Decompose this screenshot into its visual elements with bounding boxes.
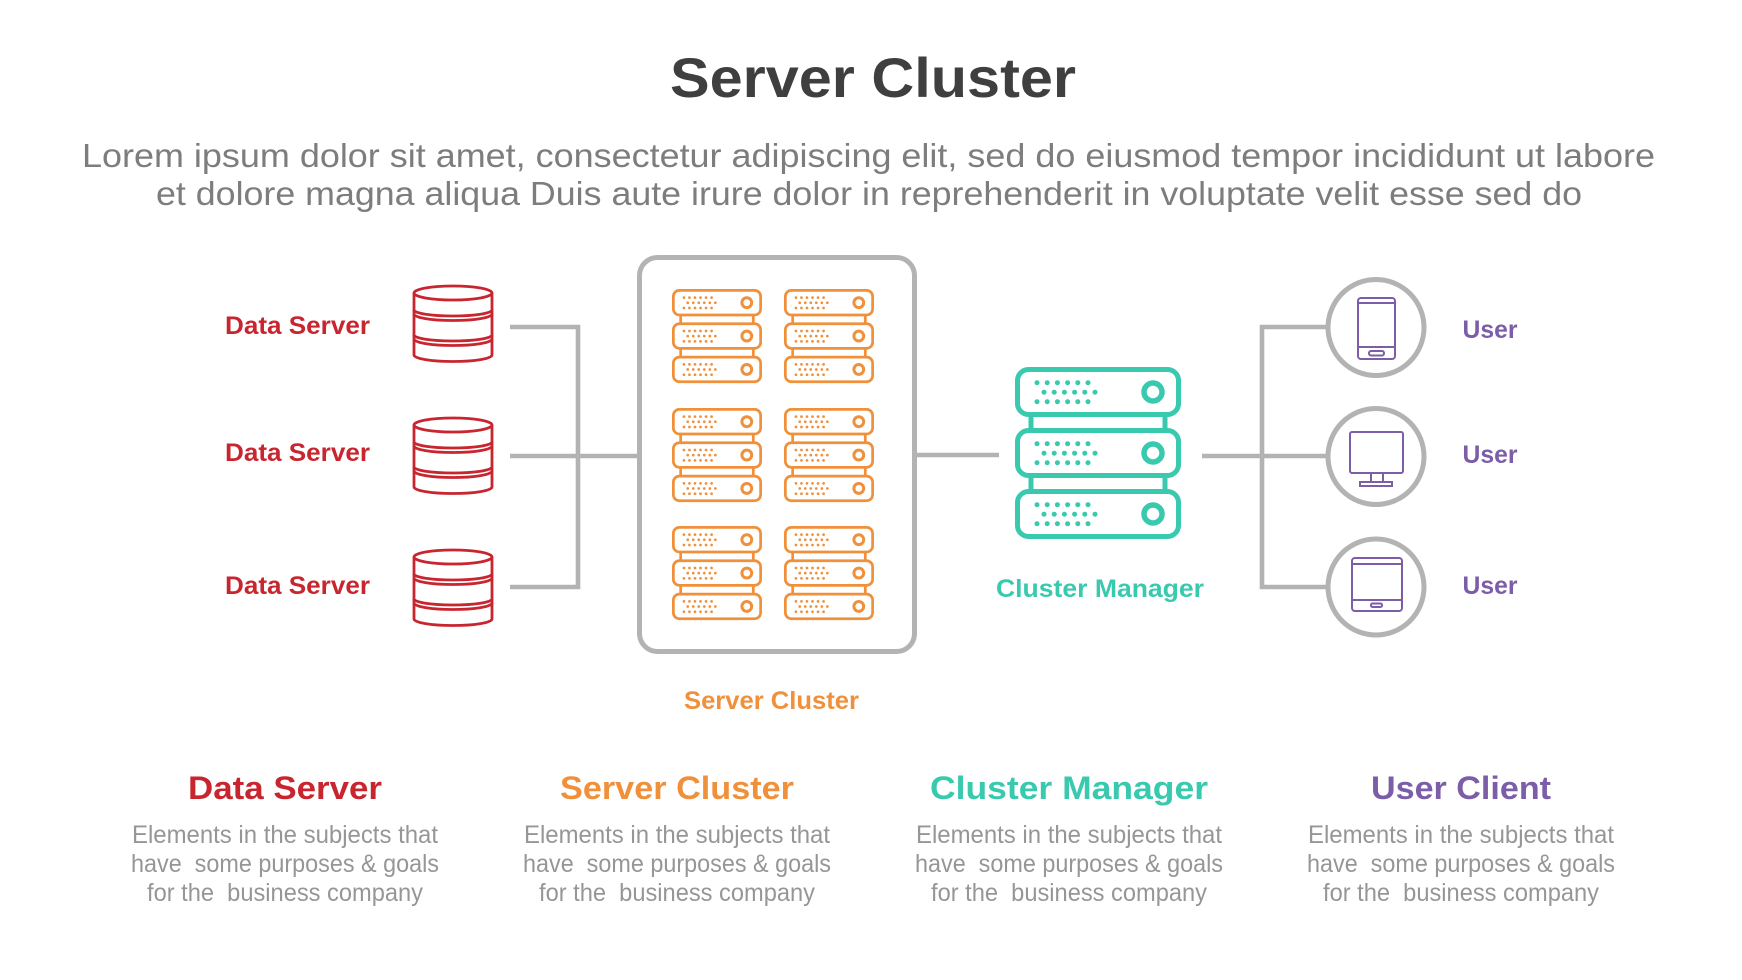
icon: database top [414,286,492,361]
column: server cluster: Elements in the subjects that [524,821,830,849]
user circle: tablet [1328,539,1424,635]
column: cluster manager [915,770,1223,907]
column: user client: for the business company [1323,879,1599,907]
data server labels: Data Server [225,439,370,467]
subtitle text: Lorem ipsum dolor sit amet, consectetur adipiscing elit, sed do eiusmod tempor incididunt ut labore [82,137,1655,174]
connector: data servers to server cluster [510,327,638,587]
column: server cluster [523,770,831,907]
column: server cluster: for the business company [539,879,815,907]
cluster manager label: Cluster Manager [996,575,1204,603]
column: data server [131,770,439,907]
column: data server: Elements in the subjects that [132,821,438,849]
server cluster label: Server Cluster [684,687,859,715]
column: cluster manager: Elements in the subjects that [916,821,1222,849]
subtitle text: et dolore magna aliqua Duis aute irure dolor in reprehenderit in voluptate velit esse sed do [156,175,1582,212]
connector: server cluster to cluster manager [917,453,999,457]
user labels: User [1462,316,1518,344]
icon: cluster manager server [1018,370,1178,536]
subtitle text [82,137,1655,212]
column: user client [1307,770,1615,907]
data server labels: Data Server [225,312,370,340]
connector: cluster manager to users [1202,327,1328,587]
user labels: User [1462,572,1518,600]
column: server cluster: Server Cluster [560,770,794,806]
panel: server cluster box [640,258,914,652]
column: cluster manager: for the business company [931,879,1207,907]
icon: database bottom [414,550,492,625]
title: Server Cluster [670,46,1076,109]
column: cluster manager: Cluster Manager [930,770,1208,806]
data server labels [225,312,370,600]
column: user client: User Client [1371,770,1551,806]
user circle: phone [1328,280,1424,376]
column: user client: Elements in the subjects that [1308,821,1614,849]
column: server cluster: have some purposes & goals [523,850,831,878]
column: data server: have some purposes & goals [131,850,439,878]
column: data server: Data Server [188,770,382,806]
column: user client: have some purposes & goals [1307,850,1615,878]
icon: database middle [414,418,492,493]
user labels [1462,316,1518,600]
user labels: User [1462,441,1518,469]
data server labels: Data Server [225,572,370,600]
column: data server: for the business company [147,879,423,907]
user circle: monitor [1328,408,1424,504]
server rack icons [673,290,873,619]
column: cluster manager: have some purposes & goals [915,850,1223,878]
